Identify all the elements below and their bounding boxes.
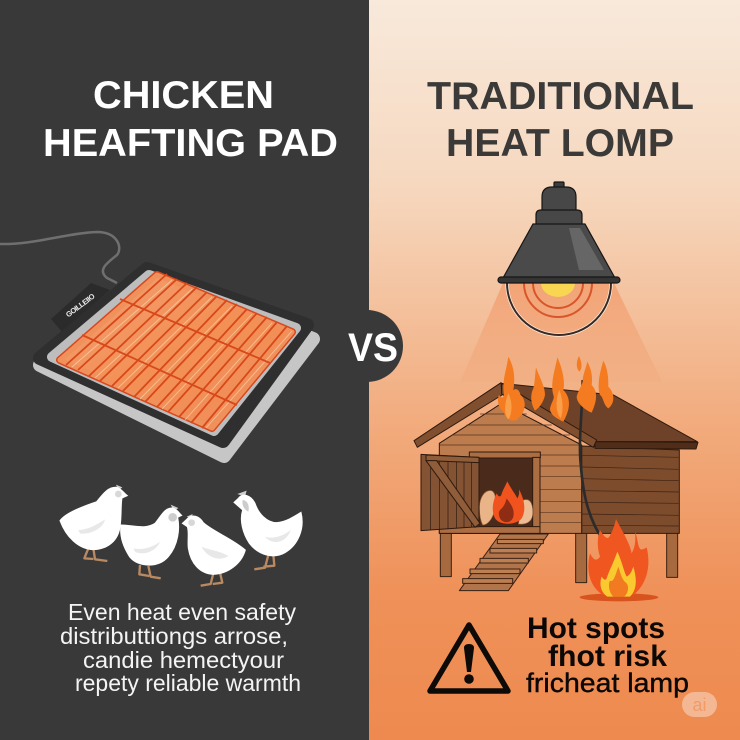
pad dark frame <box>40 269 307 441</box>
text block: lamp risk <box>526 612 689 698</box>
door frame <box>439 452 540 533</box>
roof <box>414 383 698 449</box>
chicken 3 <box>182 514 245 586</box>
heated orange surface <box>60 275 292 428</box>
roof flames <box>498 356 613 422</box>
door opening <box>478 457 533 527</box>
heating wire grid <box>66 274 287 428</box>
ground fire <box>580 519 658 601</box>
fire in doorway <box>493 481 524 524</box>
power cord <box>0 232 119 283</box>
VS badge: VS <box>348 326 398 370</box>
control box: GOILLEIIO <box>64 291 97 319</box>
light beam from lamp <box>460 283 662 382</box>
text block: pad benefits: repety reliable warmth <box>75 670 301 696</box>
icon: warning triangle <box>430 625 508 691</box>
panel: left dark background <box>0 0 369 740</box>
coop legs <box>440 533 678 583</box>
lamp shade <box>498 182 620 283</box>
text block: pad benefits: distributtiongs arrose, <box>60 623 288 649</box>
hens inside coop <box>479 491 533 525</box>
panel: right warm background <box>369 0 740 740</box>
text block: pad benefits: Even heat even safety <box>68 599 296 625</box>
illustration: burning chicken coop <box>414 356 698 601</box>
text block: lamp risk: fricheat lamp <box>526 668 689 698</box>
side wall <box>582 446 679 533</box>
VS badge <box>331 310 403 382</box>
hose <box>580 380 604 542</box>
heading: traditional heat lamp <box>427 75 694 165</box>
shade highlight <box>569 228 604 270</box>
wire guard <box>507 283 611 335</box>
heading: chicken heating pad <box>43 74 338 165</box>
pad base plate <box>40 271 313 456</box>
text block: lamp risk: Hot spots <box>527 612 665 645</box>
control box <box>51 283 110 332</box>
illustration: four white chickens <box>60 485 302 586</box>
chicken 2 <box>121 505 182 578</box>
chicken 1 <box>60 485 127 561</box>
heading: traditional heat lamp: HEAT LOMP <box>446 122 674 165</box>
heading: traditional heat lamp: TRADITIONAL <box>427 75 694 118</box>
heat rings <box>524 283 592 317</box>
pad light rim <box>52 275 296 431</box>
text block: pad benefits: candie hemectyour <box>83 647 284 673</box>
bulb <box>541 283 575 297</box>
front wall with gable <box>439 403 582 533</box>
heading: chicken heating pad: CHICKEN <box>93 74 274 117</box>
icon: heating pad <box>0 232 313 456</box>
ramp <box>459 534 548 591</box>
text block: lamp risk: fhot risk <box>548 640 667 673</box>
badge: ai: ai <box>692 695 707 715</box>
text block: pad benefits <box>60 599 301 696</box>
badge: ai <box>682 692 717 717</box>
open door <box>421 454 480 531</box>
light streaks <box>72 280 292 428</box>
wire border <box>60 275 292 428</box>
chicken 4 <box>234 491 302 569</box>
heading: chicken heating pad: HEAFTING PAD <box>43 122 338 165</box>
icon: heat lamp <box>498 182 620 335</box>
